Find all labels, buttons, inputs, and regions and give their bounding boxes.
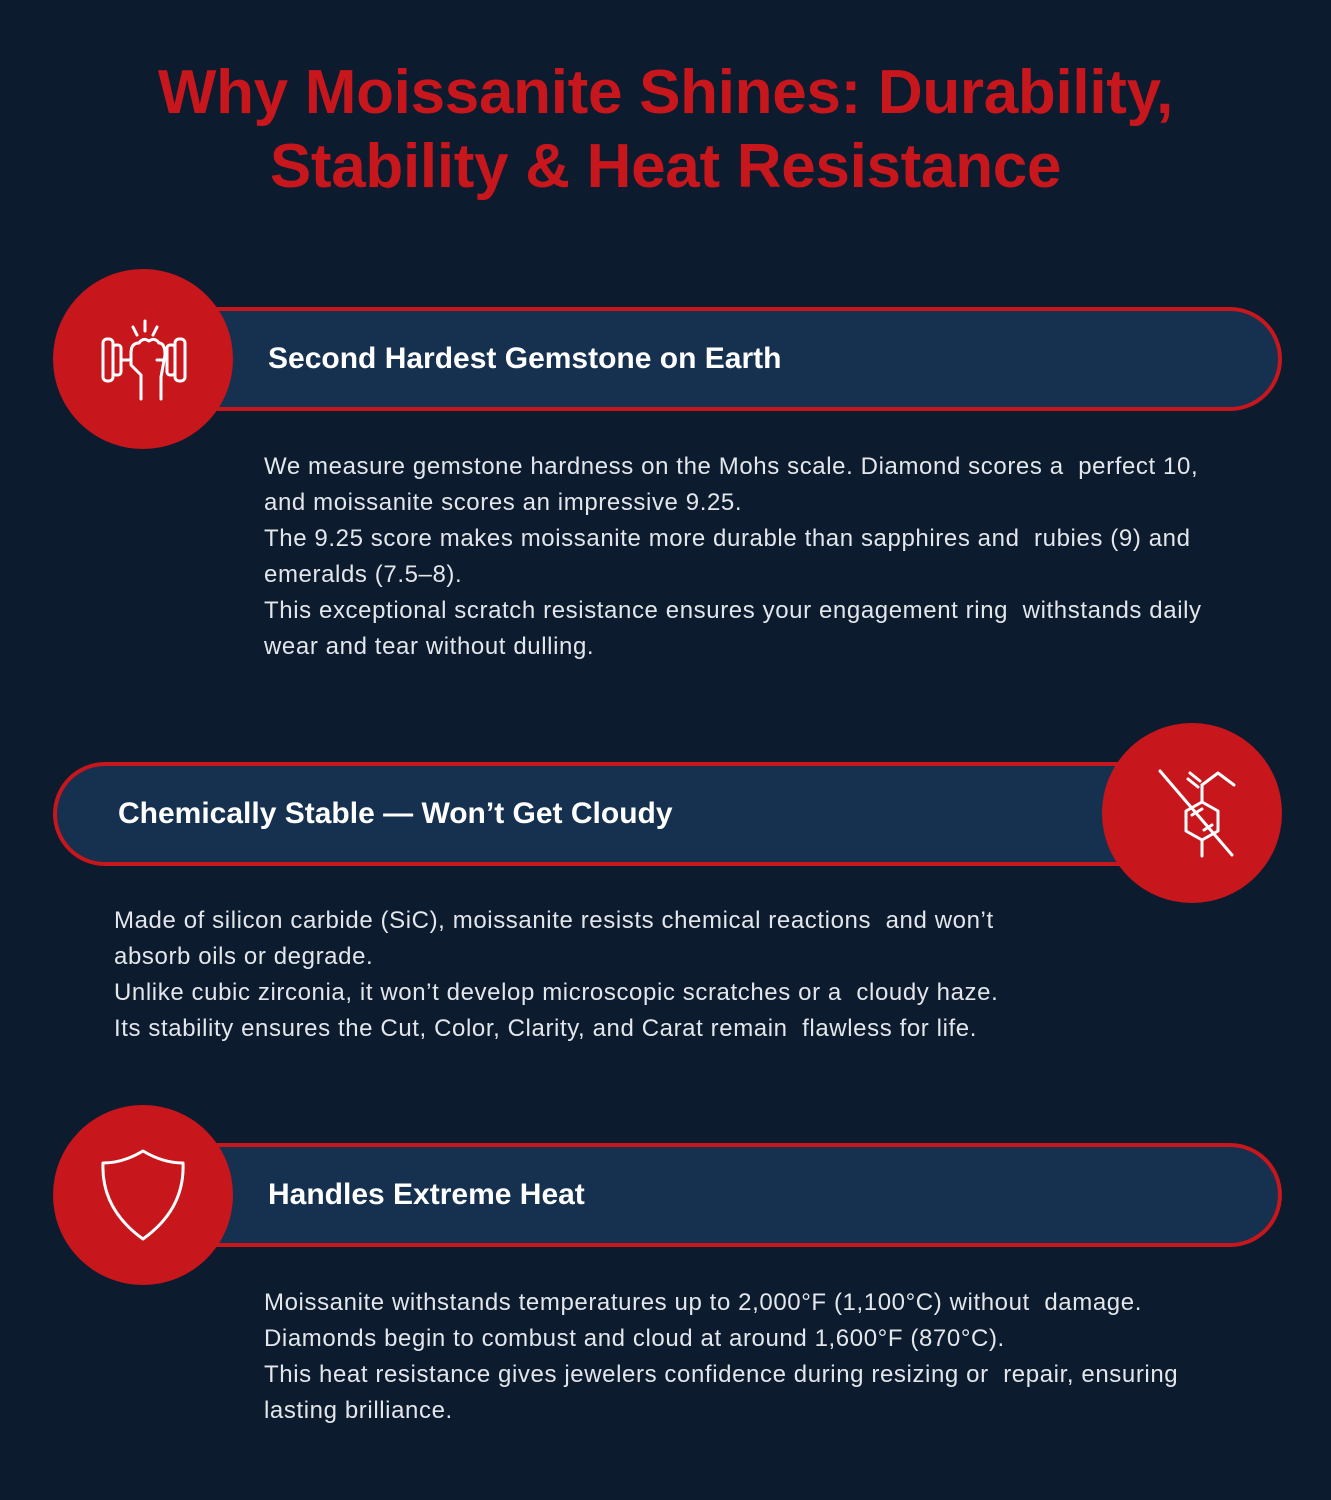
panel: chemical [53, 723, 1282, 1042]
banner: hardness [200, 307, 1282, 411]
text: chemical [114, 907, 998, 1042]
text: hardness: We measure gemstone hardness on the Mohs scale. Diamond scores a perfect 10, and moissanite scores an impressive 9.25. [264, 453, 1198, 516]
title: Stability & Heat Resistance [270, 132, 1061, 201]
panel: heat [53, 1105, 1282, 1424]
panel: hardness [53, 269, 1282, 660]
text: heat: Diamonds begin to combust and cloud at around 1,600°F (870°C). [264, 1325, 1005, 1352]
text: chemical: Its stability ensures the Cut, Color, Clarity, and Carat remain flawless for life. [114, 1015, 977, 1042]
title: Why Moissanite Shines: Durability, [158, 58, 1173, 127]
text: chemical: Unlike cubic zirconia, it won’t develop microscopic scratches or a cloudy haze. [114, 979, 998, 1006]
text: heat [264, 1289, 1178, 1424]
text: hardness: The 9.25 score makes moissanite more durable than sapphires and rubies (9) and emeralds (7.5–8). [264, 525, 1191, 588]
text: chemical: Made of silicon carbide (SiC), moissanite resists chemical reactions and won’t absorb oils or degrade. [114, 907, 994, 970]
icon: dumbbell fist [53, 269, 233, 449]
heading: hardness: Second Hardest Gemstone on Earth [268, 342, 781, 375]
text: heat: Moissanite withstands temperatures up to 2,000°F (1,100°C) without damage. [264, 1289, 1142, 1316]
text: heat: This heat resistance gives jewelers confidence during resizing or repair, ensuring lasting brilliance. [264, 1361, 1178, 1424]
icon: shield [53, 1105, 233, 1285]
heading: chemical: Chemically Stable — Won’t Get Cloudy [118, 797, 673, 830]
banner: heat [200, 1143, 1282, 1247]
heading: heat: Handles Extreme Heat [268, 1178, 585, 1211]
banner: chemical [53, 762, 1132, 866]
icon: no chemical [1102, 723, 1282, 903]
title [158, 58, 1173, 201]
text: hardness [264, 453, 1202, 660]
text: hardness: This exceptional scratch resistance ensures your engagement ring withstands daily wear and tear without dulling. [264, 597, 1202, 660]
